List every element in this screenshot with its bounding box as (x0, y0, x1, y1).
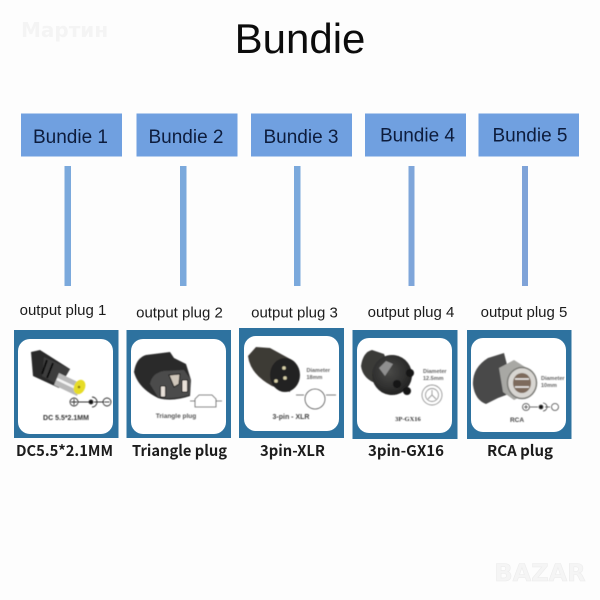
icon: RCA polarity diagram (522, 403, 558, 411)
output plug labels: output plug 2 (136, 304, 223, 322)
bundle header boxes (21, 114, 579, 156)
plug name captions: 3pin-XLR (260, 440, 325, 461)
panel: RCA (467, 330, 572, 439)
panel: RCA: 10mm (541, 383, 557, 389)
bundle header boxes: Bundie 3 (263, 127, 339, 148)
panel: 3-pin XLR: 18mm (306, 375, 323, 381)
text: GX16 diameter: Diameter (423, 369, 447, 375)
text: triangle spec: Triangle plug (156, 413, 196, 420)
text: DC spec: DC 5.5*2.1MM (43, 415, 89, 422)
output plug labels: output plug 3 (251, 304, 338, 322)
watermark: BAZAR: BAZAR (494, 559, 586, 587)
icon: triangle plug pinout (190, 395, 222, 407)
panel: Triangle plug (126, 330, 231, 438)
plug name captions: Triangle plug (132, 440, 227, 461)
icon: GX16 pinout (422, 385, 442, 405)
plug name captions: 3pin-GX16 (368, 440, 444, 461)
icon: polarity diagram (70, 397, 111, 407)
title: Bundie (235, 15, 365, 62)
icon: XLR plug (248, 347, 300, 392)
panel: 3-pin GX16: 12.5mm (423, 376, 444, 382)
output plug labels: output plug 5 (481, 304, 567, 321)
text: XLR diameter: Diameter (306, 368, 331, 374)
output plug labels: output plug 4 (368, 304, 454, 321)
text: GX16 spec: 3P-GX16 (395, 416, 422, 423)
panel: DC plug (14, 330, 118, 438)
icon: XLR pinout (296, 389, 336, 409)
panel: 3-pin XLR (239, 328, 344, 438)
icon: GX16 plug (361, 350, 416, 399)
connector bars (64, 166, 528, 286)
text: RCA diameter: Diameter (541, 376, 565, 382)
icon: RCA plug (473, 353, 536, 404)
text: XLR spec: 3-pin - XLR (273, 414, 309, 421)
bundle header boxes: Bundie 5 (492, 126, 568, 146)
panel: 3-pin GX16 (352, 330, 458, 439)
watermark: Мартин: Мартин (21, 18, 108, 42)
plug name captions: DC5.5*2.1MM (16, 440, 113, 461)
plug name captions (16, 440, 553, 461)
icon: DC barrel plug (31, 350, 88, 396)
bundle header boxes: Bundie 1 (33, 127, 108, 148)
bundle header boxes: Bundie 2 (148, 127, 224, 148)
icon: triangle plug (134, 352, 191, 400)
bundle header boxes: Bundie 4 (380, 126, 455, 146)
output plug labels: output plug 1 (20, 302, 106, 319)
output plug labels (20, 302, 567, 322)
text: RCA spec: RCA (510, 417, 524, 424)
plug name captions: RCA plug (487, 440, 553, 461)
